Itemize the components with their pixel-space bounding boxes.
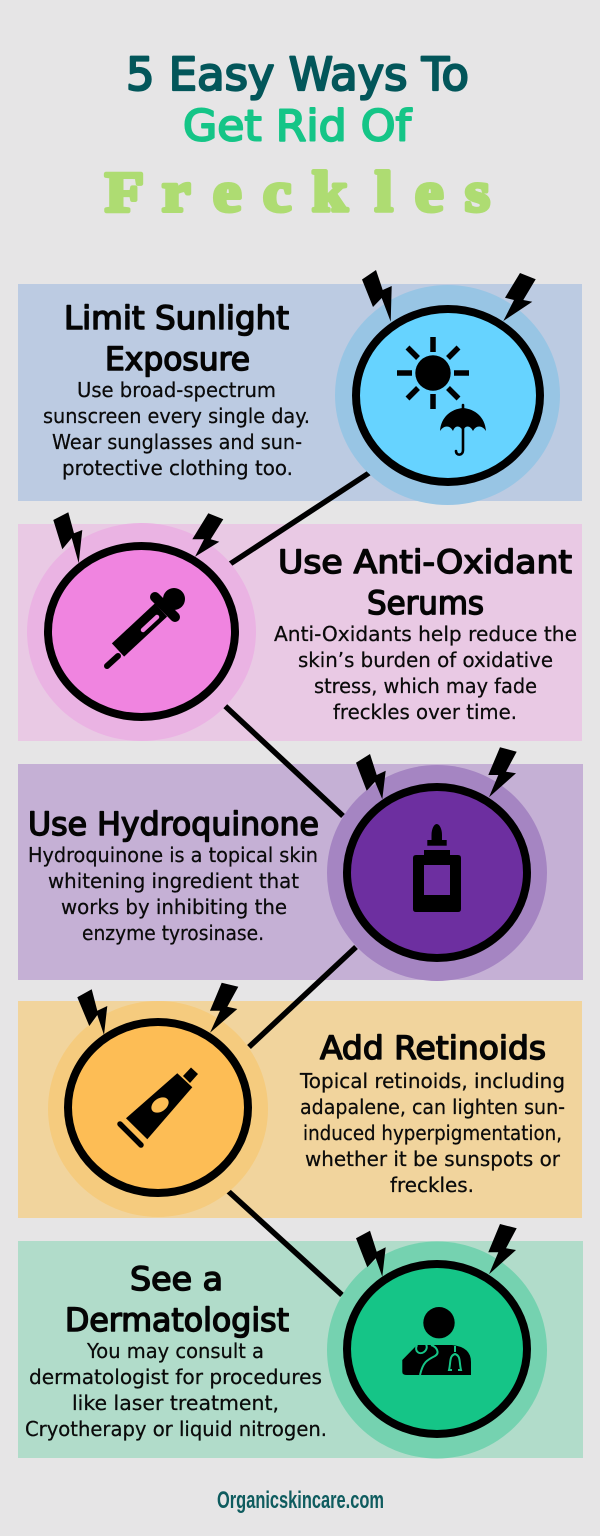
icon: lightning left xyxy=(53,512,82,563)
halo xyxy=(335,285,560,505)
heading line 2: Exposure xyxy=(105,340,250,378)
heading: Limit Sunlight xyxy=(64,299,289,337)
icon: lightning right xyxy=(503,273,536,321)
icon: lightning left xyxy=(77,989,107,1035)
icon: lightning left xyxy=(362,270,392,322)
body: skin’s burden of oxidative xyxy=(298,648,553,672)
body: enzyme tyrosinase. xyxy=(82,921,264,945)
icon: doctor xyxy=(402,1307,471,1375)
body: freckles. xyxy=(390,1173,474,1197)
icon: dropper xyxy=(107,588,185,666)
body: freckles over time. xyxy=(333,700,517,724)
title line 2: Get Rid Of xyxy=(183,102,412,152)
ring xyxy=(48,546,235,717)
heading: Use Anti-Oxidant xyxy=(278,543,572,581)
title line 1: 5 Easy Ways To xyxy=(126,48,469,101)
heading: Add Retinoids xyxy=(320,1029,546,1067)
panel: hydroquinone xyxy=(18,764,583,980)
ring xyxy=(347,1264,527,1434)
circle badge 5: doctor xyxy=(327,1224,547,1458)
body: sunscreen every single day. xyxy=(43,404,310,428)
circle badge 1: sun protection xyxy=(335,270,560,505)
body: whether it be sunspots or xyxy=(305,1147,561,1171)
connector 4 to 5 xyxy=(228,1191,342,1295)
body: Hydroquinone is a topical skin xyxy=(28,843,318,867)
body: works by inhibiting the xyxy=(61,895,287,919)
heading: Use Hydroquinone xyxy=(28,805,319,843)
panel: retinoids xyxy=(18,1001,582,1218)
halo xyxy=(27,523,256,741)
ring xyxy=(347,787,527,958)
title line 3: Freckles xyxy=(105,161,490,224)
connector 2 to 3 xyxy=(224,705,343,816)
text block 3 xyxy=(28,805,319,945)
text block 1 xyxy=(43,299,310,480)
heading line 2: Dermatologist xyxy=(65,1301,289,1339)
body: stress, which may fade xyxy=(314,674,537,698)
icon: lightning right xyxy=(488,1224,517,1274)
heading: See a xyxy=(130,1260,223,1298)
connector arrows xyxy=(224,473,369,1295)
icon: lightning right xyxy=(192,513,223,557)
body: induced hyperpigmentation, xyxy=(303,1121,562,1145)
connector 1 to 2 xyxy=(230,473,369,564)
icon: bottle xyxy=(413,824,461,912)
body: Anti-Oxidants help reduce the xyxy=(274,622,577,646)
halo xyxy=(48,1001,268,1217)
body: You may consult a xyxy=(86,1339,264,1363)
icon: lightning left xyxy=(356,1231,386,1277)
icon: lightning left xyxy=(356,754,386,799)
icon: sun xyxy=(397,337,469,409)
heading line 2: Serums xyxy=(367,584,484,622)
ring xyxy=(68,1022,248,1193)
halo xyxy=(327,765,547,981)
title xyxy=(105,48,490,224)
text block 5 xyxy=(25,1260,327,1441)
body: Cryotherapy or liquid nitrogen. xyxy=(25,1417,327,1441)
body: Use broad-spectrum xyxy=(77,378,276,402)
body: adapalene, can lighten sun- xyxy=(300,1095,565,1119)
ring xyxy=(356,309,540,482)
footer source: Organicskincare.com xyxy=(217,1487,384,1514)
icon: umbrella xyxy=(440,405,486,455)
panel: anti-oxidant serums xyxy=(18,524,582,741)
panel: limit sunlight xyxy=(18,284,582,501)
body: whitening ingredient that xyxy=(48,869,299,893)
panel: dermatologist xyxy=(18,1241,583,1458)
halo xyxy=(327,1242,547,1458)
body: dermatologist for procedures xyxy=(29,1365,322,1389)
body: Wear sunglasses and sun- xyxy=(52,430,302,454)
icon: ointment tube xyxy=(120,1068,198,1145)
body: Topical retinoids, including xyxy=(299,1069,565,1093)
icon: lightning right xyxy=(488,747,517,797)
connector 3 to 4 xyxy=(249,947,356,1047)
text block 4 xyxy=(299,1029,565,1197)
body: like laser treatment, xyxy=(72,1391,279,1415)
body: protective clothing too. xyxy=(62,456,293,480)
icon: lightning right xyxy=(210,983,238,1033)
circle badge 4: tube xyxy=(48,983,268,1217)
circle badge 2: dropper xyxy=(27,512,256,741)
circle badge 3: bottle xyxy=(327,747,547,981)
text block 2 xyxy=(274,543,577,724)
